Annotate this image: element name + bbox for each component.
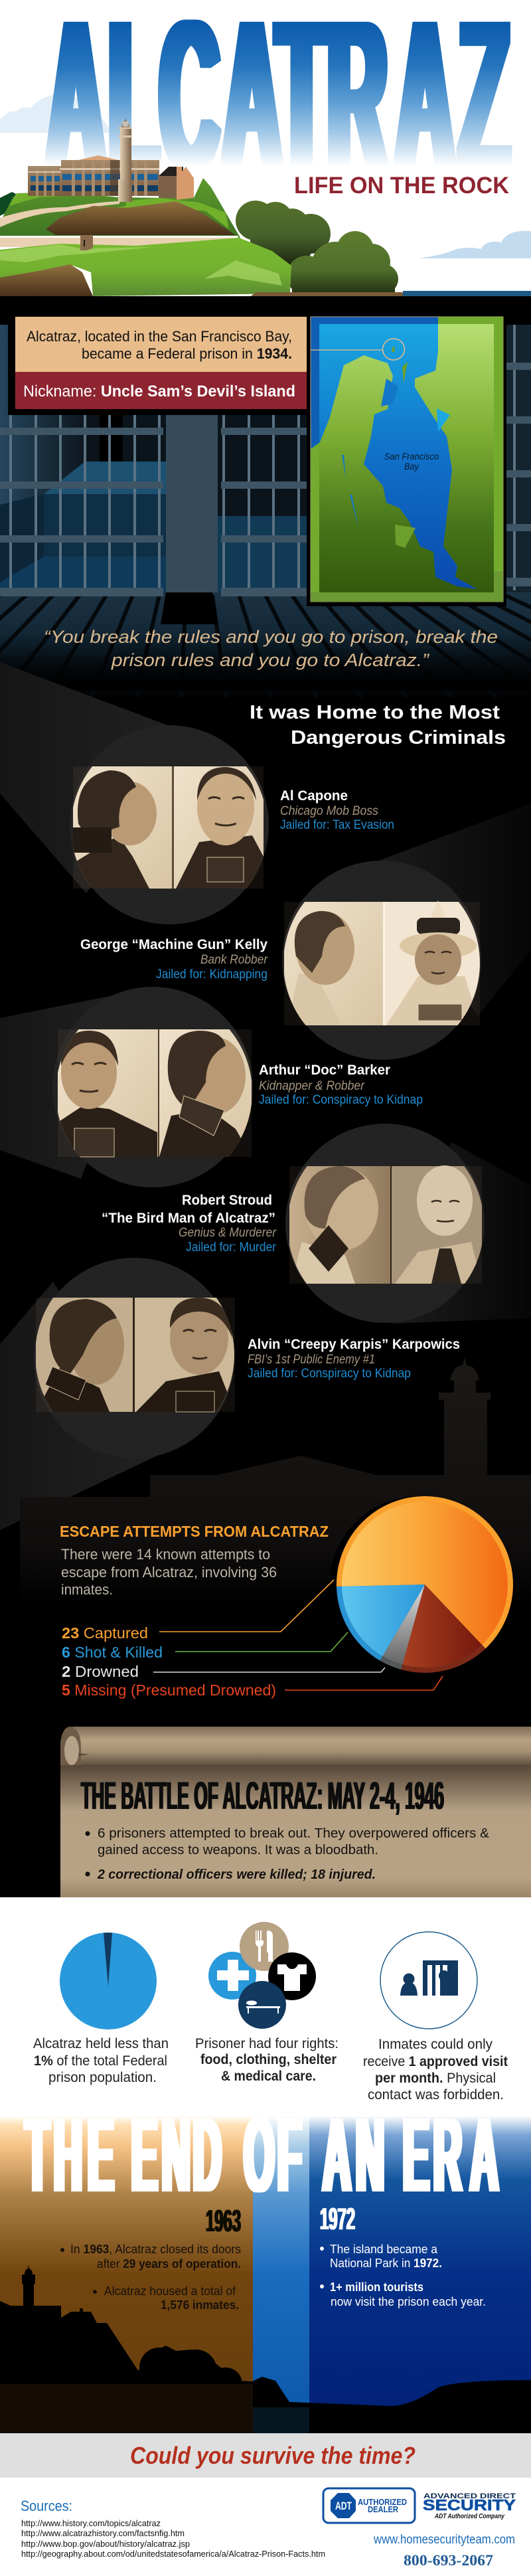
caption: George “Machine Gun” Kelly <box>80 937 267 952</box>
caption: Jailed for: Conspiracy to Kidnap <box>248 1367 411 1381</box>
caption <box>259 1063 423 1107</box>
spotlight <box>52 987 253 1187</box>
spotlight beams <box>0 662 531 1530</box>
photo <box>58 1029 252 1157</box>
fact: visits <box>363 1932 508 2103</box>
panel: Al Capone <box>70 725 394 924</box>
rights text <box>195 2036 339 2084</box>
visits text: Inmates could only <box>378 2037 493 2052</box>
tree front <box>287 231 398 296</box>
caption: “The Bird Man of Alcatraz” <box>102 1211 275 1226</box>
legend: 5 Missing (Presumed Drowned) <box>62 1681 276 1699</box>
ADT authorized dealer badge: ADT <box>335 2500 352 2512</box>
legend: 23 Captured <box>62 1624 148 1642</box>
ADT authorized dealer badge: DEALER <box>368 2504 399 2514</box>
text 1972: now visit the prison each year. <box>331 2294 486 2308</box>
text 1963: 1,576 inmates. <box>161 2298 239 2312</box>
bullets: 2 correctional officers were killed; 18 injured. <box>97 1867 376 1882</box>
house <box>159 167 194 200</box>
quote: prison rules and you go to Alcatraz.” <box>111 650 429 670</box>
floor <box>0 592 531 699</box>
heading: criminals: Dangerous Criminals <box>291 727 506 748</box>
caption: Chicago Mob Boss <box>280 804 378 818</box>
sources: http://geography.about.com/od/unitedstatesofamerica/a/Alcatraz-Prison-Facts.htm <box>21 2549 325 2559</box>
scroll body <box>60 1765 531 1897</box>
text 1972 <box>320 2242 486 2308</box>
background black <box>0 296 531 1897</box>
ADT authorized dealer badge <box>323 2488 415 2523</box>
security logo: ADT Authorized Company <box>434 2512 505 2520</box>
year 1963: 1963 <box>206 2203 241 2238</box>
icon: shelter <box>238 1981 286 2029</box>
scroll roll <box>60 1727 531 1765</box>
phone: 800-693-2067 <box>404 2552 493 2569</box>
sources: Sources: <box>21 2498 72 2514</box>
shore <box>251 292 406 296</box>
description: escape from Alcatraz, involving 36 <box>61 1564 277 1581</box>
fact: rights <box>195 1922 339 2084</box>
fact: population <box>33 1932 169 2085</box>
panel: prison section <box>0 296 531 1897</box>
road <box>0 236 238 247</box>
sources <box>21 2498 325 2559</box>
icon: visit <box>380 1932 477 2029</box>
nickname <box>15 372 311 409</box>
visits text: receive 1 approved visit <box>363 2054 508 2069</box>
nickname: Nickname: Uncle Sam’s Devil’s Island <box>23 383 295 400</box>
caption: Jailed for: Conspiracy to Kidnap <box>259 1093 423 1107</box>
caption: Al Capone <box>280 788 348 804</box>
spotlight <box>70 725 269 924</box>
info intro: Alcatraz, located in the San Francisco Bay, <box>27 328 292 345</box>
caption <box>248 1337 460 1381</box>
leader lines <box>153 1580 443 1690</box>
upper hill <box>0 178 240 238</box>
background middle <box>253 2116 309 2433</box>
website: www.homesecurityteam.com <box>373 2533 515 2547</box>
windows <box>31 174 158 181</box>
bars <box>0 325 531 596</box>
map <box>307 317 506 606</box>
heading: criminals <box>250 702 506 748</box>
security logo: ADVANCED DIRECT <box>423 2492 516 2500</box>
panel: prison facts <box>33 1922 508 2103</box>
panel: call to action <box>0 2433 531 2478</box>
info intro <box>15 317 311 372</box>
caption: Genius & Murderer <box>179 1226 277 1240</box>
panel: header <box>0 0 531 296</box>
caption: Alvin “Creepy Karpis” Karpowics <box>248 1337 460 1352</box>
pie chart <box>329 1496 513 1675</box>
panel: Robert Stroud <box>102 1124 485 1323</box>
spotlight <box>34 1258 234 1458</box>
grass top <box>9 192 229 229</box>
caption: Kidnapper & Robber <box>259 1079 365 1093</box>
tower <box>118 118 132 202</box>
population text: Alcatraz held less than <box>33 2036 169 2051</box>
caption: Jailed for: Tax Evasion <box>280 818 394 832</box>
panel: Alvin Karpis <box>34 1258 460 1458</box>
text 1963 <box>60 2242 241 2312</box>
caption <box>280 788 394 832</box>
photo <box>36 1298 235 1412</box>
caption: Jailed for: Murder <box>186 1241 277 1254</box>
text 1972: 1+ million tourists <box>330 2280 423 2294</box>
water <box>403 291 531 296</box>
visits text: per month. Physical <box>375 2071 496 2086</box>
cell block background <box>0 325 531 592</box>
center pillar <box>166 415 218 592</box>
icon: clothing <box>268 1952 316 2000</box>
population text: prison population. <box>48 2070 157 2085</box>
panel: George Machine Gun Kelly <box>80 861 481 1060</box>
photo <box>73 766 264 889</box>
cliff <box>46 201 236 235</box>
slice: drowned <box>380 1585 425 1670</box>
text 1963: In 1963, Alcatraz closed its doors <box>70 2242 241 2256</box>
text 1972: The island became a <box>330 2242 438 2256</box>
caption: Robert Stroud <box>182 1193 272 1208</box>
text 1963: Alcatraz housed a total of <box>104 2284 236 2298</box>
description: There were 14 known attempts to <box>61 1546 270 1563</box>
population pie <box>60 1932 157 2029</box>
lighthouse silhouette <box>20 1357 531 1602</box>
quote <box>44 627 498 670</box>
gate <box>80 235 93 250</box>
illustration: island <box>0 118 531 296</box>
slice: missing <box>401 1585 486 1673</box>
rights text: food, clothing, shelter <box>200 2052 337 2067</box>
population text: 1% of the total Federal <box>34 2053 167 2069</box>
background 1972 <box>309 2116 531 2433</box>
panel: end of an era <box>0 2095 531 2433</box>
visits text <box>363 2037 508 2103</box>
icon: food <box>240 1922 289 1971</box>
legend <box>62 1624 276 1699</box>
spotlight <box>282 861 481 1060</box>
sources: http://www.alcatrazhistory.com/factsnfig.htm <box>21 2528 185 2538</box>
ADT authorized dealer badge: AUTHORIZED <box>358 2497 407 2507</box>
roof <box>78 155 118 160</box>
legend: 6 Shot & Killed <box>62 1644 163 1661</box>
slice: captured <box>337 1496 513 1648</box>
heading: ESCAPE ATTEMPTS FROM ALCATRAZ <box>60 1523 329 1540</box>
photo <box>289 1165 482 1284</box>
sources: http://www.bop.gov/about/history/alcatraz.jsp <box>21 2539 190 2549</box>
description <box>61 1546 277 1598</box>
map label: Bay <box>404 461 419 472</box>
panel: battle scroll <box>60 1727 531 1897</box>
security logo: SECURITY <box>423 2496 516 2514</box>
rights text: & medical care. <box>221 2069 316 2084</box>
caption: Jailed for: Kidnapping <box>156 968 267 982</box>
spotlight <box>285 1124 485 1323</box>
map label: San Francisco <box>384 451 439 462</box>
text 1972: National Park in 1972. <box>330 2256 442 2270</box>
text 1963: after 29 years of operation. <box>97 2257 241 2271</box>
heading: criminals: It was Home to the Most <box>250 702 500 723</box>
bullets: gained access to weapons. It was a bloodbath. <box>98 1843 378 1857</box>
panel: footer <box>0 2478 531 2576</box>
caption: Bank Robber <box>200 953 268 967</box>
panel: Arthur Doc Barker <box>52 987 423 1187</box>
slice: shot and killed <box>337 1585 425 1661</box>
bullets <box>85 1826 490 1882</box>
icon: medical <box>208 1952 256 2000</box>
info intro: became a Federal prison in 1934. <box>82 345 292 362</box>
background 1963 <box>0 2116 253 2433</box>
population text <box>33 2036 169 2085</box>
tree back <box>236 201 331 267</box>
description: inmates. <box>61 1581 113 1598</box>
quote: “You break the rules and you go to prison, break the <box>44 627 498 647</box>
far evergreen <box>0 192 16 216</box>
caption: Arthur “Doc” Barker <box>259 1063 390 1078</box>
legend: 2 Drowned <box>62 1663 139 1680</box>
year 1972: 1972 <box>320 2201 355 2236</box>
bullets: 6 prisoners attempted to break out. They overpowered officers & <box>98 1826 490 1841</box>
cloud right <box>418 231 531 258</box>
caption <box>80 937 268 982</box>
building wing <box>28 166 61 196</box>
photo <box>284 901 480 1025</box>
cloud left <box>0 94 110 133</box>
grass highlight <box>0 244 282 286</box>
cliff bottom <box>0 264 93 296</box>
caption <box>102 1193 277 1254</box>
subtitle: LIFE ON THE ROCK <box>294 173 509 199</box>
security logo <box>423 2492 516 2520</box>
visits text: contact was forbidden. <box>368 2087 504 2103</box>
info box <box>8 317 311 415</box>
island silhouette <box>0 2265 531 2433</box>
building main <box>61 160 159 196</box>
winding path <box>0 201 119 227</box>
heading: THE END OF AN ERA <box>25 2095 498 2214</box>
cta text: Could you survive the time? <box>130 2442 416 2469</box>
map label <box>384 451 439 472</box>
Alcatraz marker <box>311 339 405 360</box>
ground glow <box>0 2384 309 2433</box>
sources: http://www.history.com/topics/alcatraz <box>21 2518 161 2528</box>
caption: FBI’s 1st Public Enemy #1 <box>248 1353 375 1367</box>
lower grass <box>0 238 291 296</box>
panel: escape attempts <box>60 1496 513 1699</box>
rights text: Prisoner had four rights: <box>195 2036 339 2051</box>
